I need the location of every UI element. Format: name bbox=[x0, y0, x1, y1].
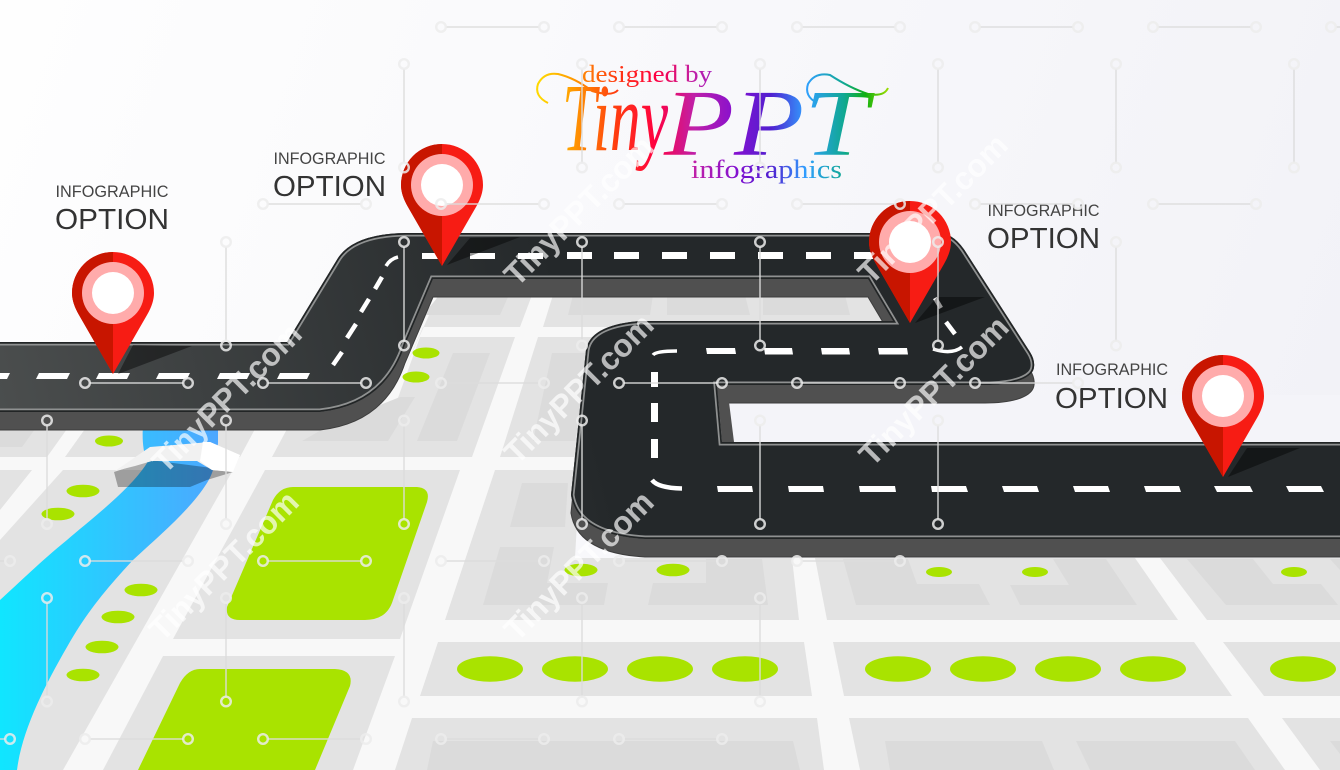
pin 4 bbox=[1182, 355, 1264, 477]
lane dashes: left bend bbox=[652, 351, 682, 488]
map streets bbox=[0, 295, 1340, 770]
road side wall bbox=[0, 251, 1340, 557]
label: option 2 bbox=[273, 149, 386, 203]
watermarks: TinyPPT.com bbox=[497, 129, 661, 293]
lane dashes: left section bbox=[0, 373, 310, 379]
watermarks: TinyPPT.com bbox=[852, 309, 1016, 473]
watermarks: TinyPPT.com bbox=[145, 316, 309, 480]
green parks bbox=[138, 487, 428, 770]
label: option 1: OPTION bbox=[55, 204, 169, 236]
logo: designed by: designed by bbox=[582, 62, 712, 88]
green tree dots bbox=[42, 348, 1336, 682]
road bbox=[0, 233, 1340, 557]
label: option 4: OPTION bbox=[1055, 383, 1168, 415]
pin 3 bbox=[869, 201, 951, 323]
map inner blocks bbox=[0, 295, 1340, 770]
lane dashes: right slant bbox=[933, 298, 962, 352]
watermarks: TinyPPT.com bbox=[497, 307, 661, 471]
logo: PPT: PPT bbox=[663, 72, 875, 176]
lane dashes: upper section bbox=[422, 252, 874, 259]
label: option 2: OPTION bbox=[273, 171, 386, 203]
label: option 4: INFOGRAPHIC bbox=[1056, 360, 1168, 379]
city map bbox=[0, 295, 1340, 770]
lane dashes: middle section bbox=[706, 348, 908, 354]
pin 1 bbox=[72, 252, 154, 374]
bridge bbox=[114, 442, 240, 487]
logo bbox=[537, 62, 888, 184]
label: option 4 bbox=[1055, 360, 1168, 415]
logo: flourish strokes bbox=[537, 74, 888, 103]
road edge lines bbox=[0, 233, 1340, 539]
bridge deck bbox=[115, 442, 240, 472]
watermarks bbox=[142, 127, 1016, 648]
label: option 1: INFOGRAPHIC bbox=[56, 182, 168, 201]
lane dashes: slanted section bbox=[333, 257, 398, 365]
watermarks: TinyPPT.com bbox=[142, 484, 306, 648]
pin shadows bbox=[118, 237, 1300, 477]
river bbox=[0, 425, 218, 770]
watermarks: TinyPPT.com bbox=[851, 127, 1015, 291]
pin 2 bbox=[401, 144, 483, 266]
label: option 1 bbox=[55, 182, 169, 236]
background patch inside road bend bbox=[725, 395, 1340, 445]
map blocks bbox=[0, 295, 1340, 770]
label: option 3: INFOGRAPHIC bbox=[988, 201, 1100, 220]
watermarks: TinyPPT.com bbox=[497, 484, 661, 648]
label: option 3 bbox=[987, 201, 1100, 255]
road surface bbox=[0, 233, 1340, 539]
label: option 2: INFOGRAPHIC bbox=[274, 149, 386, 168]
lane dashes: bottom section bbox=[717, 486, 1324, 492]
bridge shadow bbox=[114, 460, 233, 487]
logo: Tiny: Tiny bbox=[562, 64, 668, 171]
logo: infographics: infographics bbox=[691, 155, 842, 184]
label: option 3: OPTION bbox=[987, 223, 1100, 255]
